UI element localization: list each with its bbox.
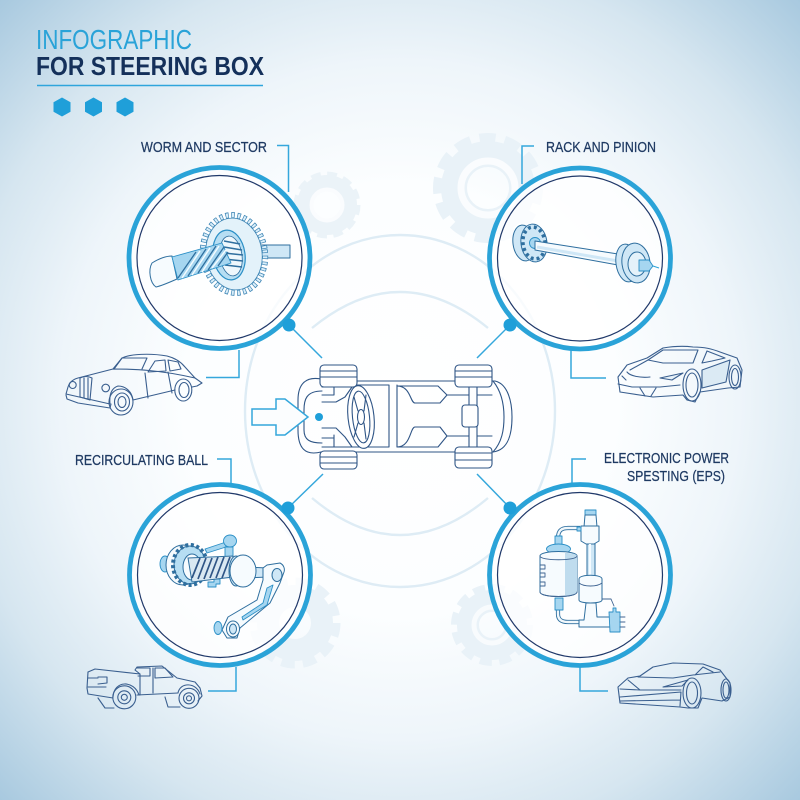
background gear: lower left	[254, 582, 336, 664]
background gear: small top	[297, 175, 357, 235]
panel: worm and sector	[129, 168, 310, 348]
central outer ring	[245, 235, 555, 587]
label: rack and pinion: RACK AND PINION	[546, 139, 656, 156]
title: INFOGRAPHIC	[36, 24, 192, 55]
icon: sports car	[618, 346, 742, 402]
icon: electric sports car	[618, 663, 731, 708]
label: electronic power steering	[604, 450, 729, 485]
icon: worm gear	[150, 211, 290, 297]
central car chassis	[298, 365, 512, 469]
background gear: lower right	[455, 588, 529, 662]
icon: rack and pinion axle	[511, 222, 659, 285]
steering wheel	[345, 384, 377, 450]
label: recirculating ball: RECIRCULATING BALL	[75, 452, 208, 469]
icon: pickup truck	[87, 666, 202, 709]
icon: vintage car	[66, 354, 202, 415]
steering point dot	[315, 413, 323, 421]
label: electronic power steering: ELECTRONIC POWER	[604, 450, 729, 467]
title: FOR STEERING BOX	[36, 51, 265, 81]
icon: EPS motor and pump	[540, 510, 625, 632]
arrow	[252, 399, 308, 435]
connectors	[206, 146, 608, 691]
panel: rack and pinion	[490, 168, 670, 349]
title	[36, 24, 265, 86]
panel: recirculating ball	[130, 484, 310, 666]
panel: electronic power steering	[490, 484, 670, 666]
background gear: large top	[438, 138, 538, 238]
central inner ring arcs	[312, 292, 488, 535]
label: worm and sector: WORM AND SECTOR	[141, 139, 267, 156]
hexagon markers	[54, 98, 134, 116]
label: electronic power steering: SPESTING (EPS)	[627, 468, 725, 485]
icon: recirculating ball gear	[160, 535, 284, 638]
